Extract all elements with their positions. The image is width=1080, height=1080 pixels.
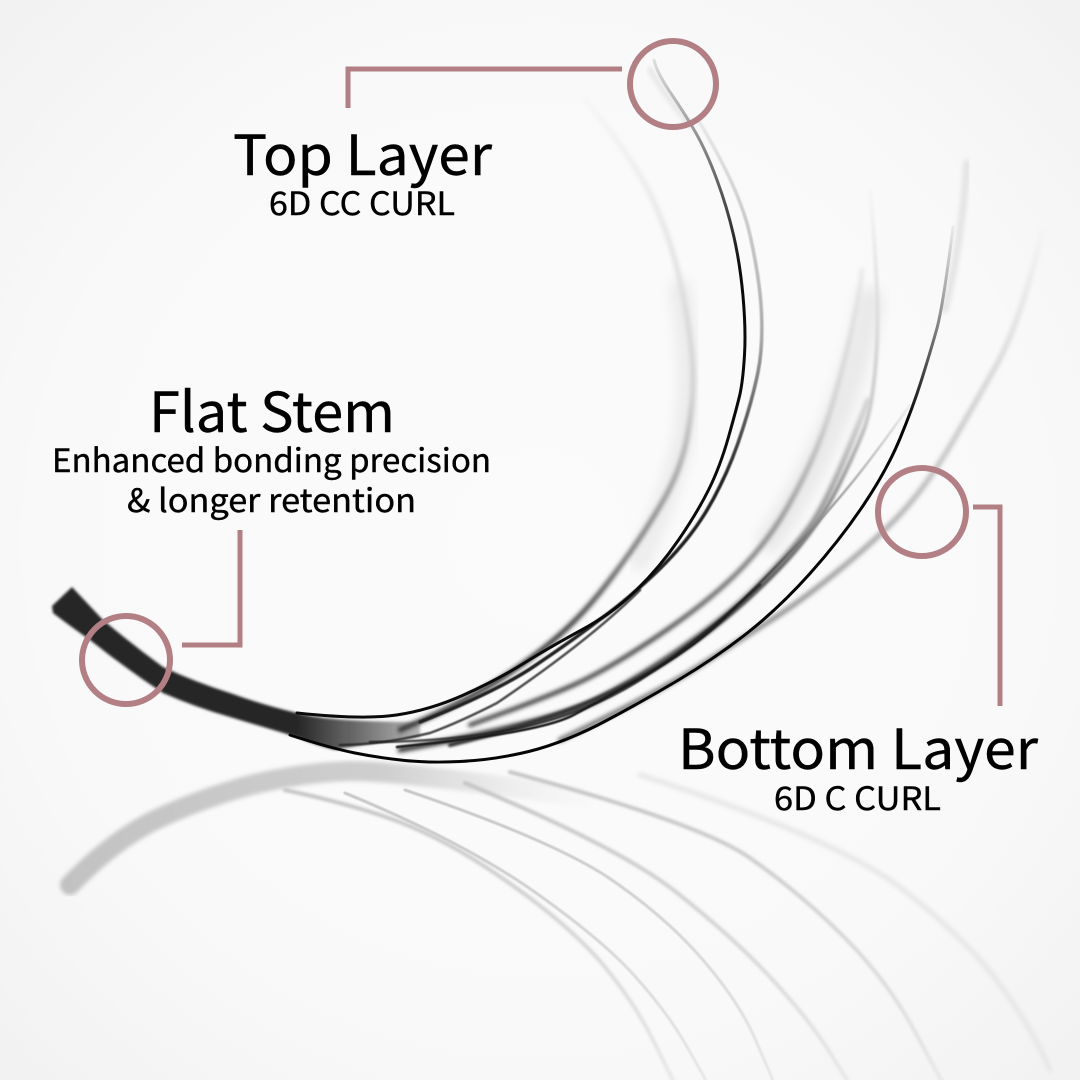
flat stem — [52, 587, 420, 750]
callout: flat stem — [82, 530, 240, 704]
heading: top layer: Top Layer — [233, 111, 493, 191]
blurred background lash fibres — [400, 70, 1043, 750]
bottom layer fibre — [290, 227, 953, 762]
heading: flat stem: Flat Stem — [149, 368, 395, 448]
heading: top layer — [233, 111, 493, 225]
heading: flat stem: Enhanced bonding precision — [52, 436, 491, 482]
secondary fibre beside top layer — [420, 123, 762, 722]
heading: flat stem: & longer retention — [127, 476, 416, 522]
lash fan with flat stem — [52, 60, 953, 762]
lash reflection — [70, 771, 1050, 1080]
callout: top layer — [348, 41, 716, 127]
heading: bottom layer: 6D C CURL — [774, 774, 941, 820]
top layer fibre — [297, 60, 745, 717]
heading: bottom layer — [678, 705, 1039, 820]
callout: bottom layer — [878, 468, 1000, 706]
heading: top layer: 6D CC CURL — [269, 179, 455, 225]
lower inner fibres — [340, 590, 640, 745]
heading: bottom layer: Bottom Layer — [678, 705, 1039, 785]
heading: flat stem — [52, 368, 491, 522]
